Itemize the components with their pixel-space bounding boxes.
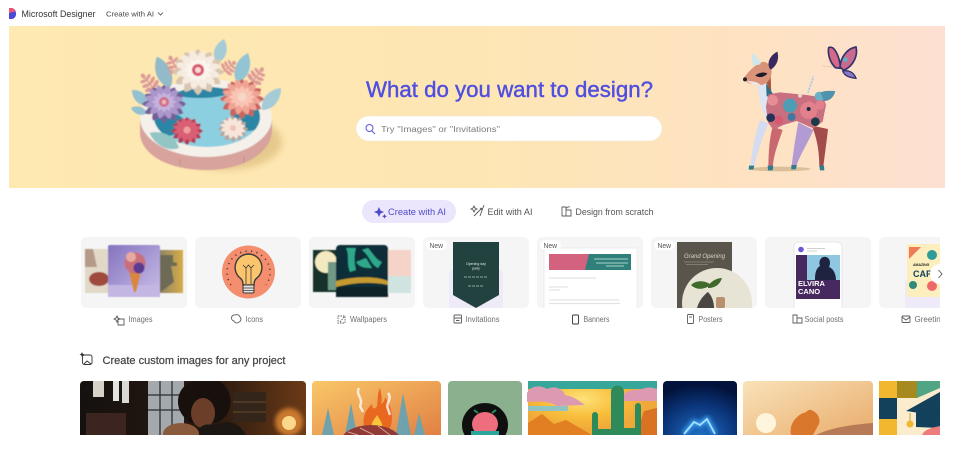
tab: Edit with AI <box>471 205 532 217</box>
section heading: Create custom images for any project <box>102 355 286 367</box>
card: Banners <box>537 237 643 324</box>
caption: Banners <box>584 315 610 324</box>
brand name: Microsoft Designer <box>22 9 96 19</box>
card: Wallpapers <box>309 237 415 324</box>
tab: Edit with AI: Edit with AI <box>488 207 532 217</box>
Create with AI menu: Create with AI <box>106 10 154 18</box>
card: Social posts: CANO <box>798 287 820 296</box>
flower: red <box>170 115 204 145</box>
leaves <box>128 37 286 154</box>
illustration: flower pond <box>128 37 286 170</box>
card: Posters: Grand Opening <box>684 254 726 260</box>
flower: pink <box>218 74 266 120</box>
icon: Designer logo <box>9 8 16 19</box>
card: Invitations: party <box>472 266 480 270</box>
carousel next button <box>930 264 950 284</box>
caption: Images <box>128 315 152 324</box>
icon: search <box>366 124 375 134</box>
card: Social posts: ELVIRA <box>798 279 826 288</box>
image: woman portrait on green <box>448 381 522 435</box>
card: Images <box>81 237 187 325</box>
illustration: fawn and butterfly <box>743 47 856 171</box>
search box: Try "Images" or "Invitations" <box>381 125 500 134</box>
card: Greeting cards <box>879 237 940 323</box>
card: Invitations <box>423 237 529 324</box>
flower body <box>766 92 826 130</box>
tab: Design from scratch: Design from scratch <box>576 207 654 217</box>
flower: small white <box>218 114 248 142</box>
pond shadows <box>154 86 260 136</box>
New badge: New <box>658 243 672 250</box>
card: Posters <box>651 237 757 324</box>
card: Icons <box>195 237 301 324</box>
caption: Posters <box>698 315 722 324</box>
caption: Wallpapers <box>350 315 387 324</box>
section heading <box>80 352 286 367</box>
image: burger and flames <box>312 381 441 435</box>
New badge: New <box>430 243 444 250</box>
hero banner <box>9 26 945 188</box>
card: Greeting cards: CAF <box>913 269 932 279</box>
category carousel <box>81 237 940 326</box>
tail <box>821 91 835 101</box>
search box <box>356 116 662 141</box>
tab: Create with AI <box>362 200 456 223</box>
card: Social posts <box>765 237 871 324</box>
gallery of image thumbnails <box>80 381 940 435</box>
caption: Icons <box>246 315 263 324</box>
tabs <box>362 200 654 223</box>
ears <box>752 53 761 66</box>
neck and chest <box>757 78 771 123</box>
icon: sparkle image <box>80 352 92 364</box>
sprig <box>808 76 813 93</box>
image: mother and child reading <box>80 381 306 435</box>
disc <box>140 116 272 170</box>
card: Invitations: Opening day <box>466 262 486 266</box>
head <box>744 62 772 85</box>
image: desert cactus <box>527 381 657 441</box>
card: Greeting cards: AMAZING <box>913 263 930 267</box>
image: graduation cap <box>879 381 940 441</box>
butterfly <box>822 47 856 78</box>
legs <box>750 120 768 167</box>
tab: Create with AI: Create with AI <box>388 207 446 217</box>
image: sunset flower <box>743 381 873 441</box>
caption: Social posts <box>804 315 844 324</box>
flower: purple <box>140 80 188 124</box>
flower: white <box>171 45 225 95</box>
New badge: New <box>544 243 558 250</box>
top navigation bar <box>9 8 163 19</box>
caption: Invitations <box>466 315 500 324</box>
ferns <box>134 51 271 98</box>
heading: What do you want to design? <box>366 77 653 102</box>
image: glowing blue house <box>663 381 737 435</box>
